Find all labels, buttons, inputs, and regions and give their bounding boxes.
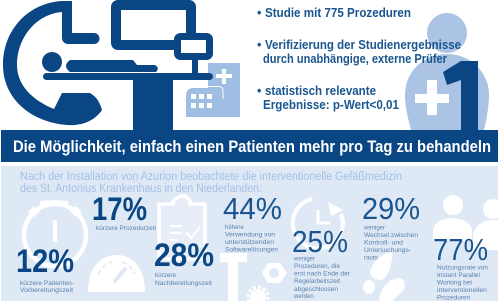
icon: footprints	[363, 252, 405, 301]
stat: 29 percent: Untersuchungs-	[364, 248, 411, 254]
icon: angiography system	[3, 1, 240, 130]
stat: 28 percent: kürzere	[155, 273, 177, 279]
stat: 29 percent: 29%	[362, 191, 420, 226]
stat: 17 percent: kürzere Prozedurzeit	[96, 226, 156, 232]
bullet list: •	[257, 38, 261, 52]
stat: 25 percent: Regelarbeitszeit	[294, 279, 340, 285]
bullet list: Verifizierung der Studienergebnisse	[265, 38, 461, 52]
stat: 29 percent: Wechsel zwischen	[364, 233, 418, 239]
stat: 77 percent: interventionellen	[437, 288, 487, 294]
banner	[1, 130, 498, 162]
stat: 77 percent: Nutzungsrate von	[437, 266, 488, 272]
stat: 44 percent: unterstützenden	[225, 240, 274, 246]
stat: 44 percent	[223, 191, 282, 254]
icon: stopwatch	[24, 200, 86, 266]
stat: 77 percent: Instant Parallel	[437, 273, 480, 279]
stat: 44 percent: Softwarelösungen	[225, 248, 278, 254]
stat: 12 percent: 12%	[16, 243, 74, 279]
panel: results background	[1, 166, 498, 301]
stat: 44 percent: höhere	[225, 225, 244, 231]
stat: 25 percent: abgeschlossen	[294, 287, 338, 293]
stat: 28 percent: 28%	[154, 237, 214, 273]
stat: 25 percent	[292, 224, 350, 300]
bullet list: •	[257, 6, 261, 20]
stat: 44 percent: Verwendung von	[225, 232, 275, 238]
stat: 29 percent: weniger	[363, 226, 385, 232]
stat: 12 percent	[16, 243, 74, 294]
stat: 12 percent: Vorbereitungszeit	[20, 288, 73, 294]
intro text	[20, 171, 402, 195]
bullet list	[257, 6, 461, 112]
stat: 77 percent	[433, 232, 488, 301]
icon: clock with arrow	[293, 199, 343, 248]
bullet list: Ergebnisse: p-Wert<0,01	[263, 98, 399, 112]
stat: 25 percent: werden	[293, 294, 314, 300]
bullet list: durch unabhängige, externe Prüfer	[263, 52, 447, 66]
stat: 29 percent: raum	[364, 256, 378, 262]
stat: 25 percent: weniger	[293, 256, 315, 262]
stat: 29 percent	[362, 191, 420, 262]
stat: 12 percent: kürzere Patienten-	[20, 281, 74, 287]
stat: 28 percent: Nachbereitungszeit	[155, 281, 212, 287]
icon: people	[433, 195, 501, 250]
stat: 44 percent: 44%	[223, 191, 282, 226]
stat: 17 percent: 17%	[92, 191, 147, 227]
intro text: des St. Antonius Krankenhaus in den Niederlanden:	[20, 183, 262, 195]
stat: 28 percent	[154, 237, 214, 287]
stat: 25 percent: 25%	[292, 224, 348, 259]
icon: person with plus one	[405, 13, 489, 130]
stat: 77 percent: Working bei	[437, 280, 472, 286]
intro text: Nach der Installation von Azurion beobachtete die interventionelle Gefäßmedizin	[20, 171, 402, 183]
bullet list: Studie mit 775 Prozeduren	[265, 6, 411, 20]
bullet list: •	[257, 84, 261, 98]
stat: 25 percent: Prozeduren, die	[294, 264, 341, 270]
stat: 25 percent: erst nach Ende der	[294, 272, 350, 278]
icon: tools	[220, 253, 287, 301]
bullet list: statistisch relevante	[265, 84, 376, 98]
icon: clipboard	[159, 196, 205, 259]
stat: 29 percent: Kontroll- und	[364, 240, 403, 246]
stat: 77 percent: 77%	[433, 232, 488, 267]
icon: gauge	[88, 255, 145, 292]
